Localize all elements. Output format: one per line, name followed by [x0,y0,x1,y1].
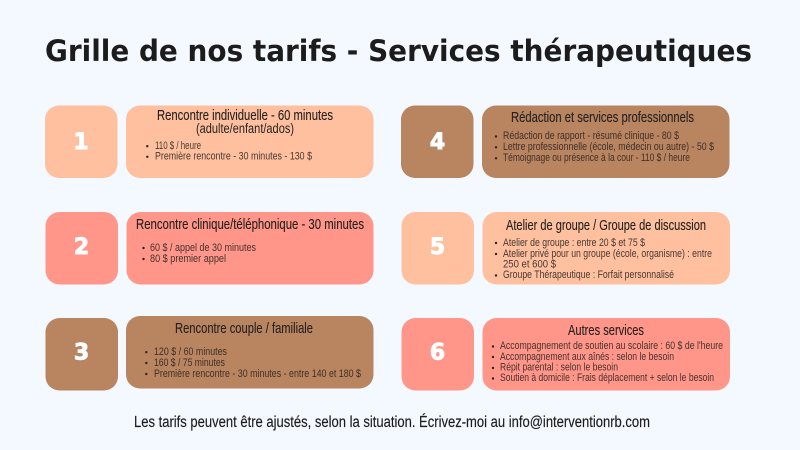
panel: service 1 [45,106,374,178]
card: rencontre clinique: 60 $ / appel de 30 minutes [150,242,256,254]
number badge 1 [45,106,118,178]
card: atelier de groupe: Atelier de groupe : entre 20 $ et 75 $ [503,237,645,249]
title: Grille de nos tarifs - Services thérapeutiques [45,34,752,68]
panel: service 6 [402,318,730,390]
card: rédaction: Lettre professionnelle (école, médecin ou autre) - 50 $ [503,141,714,153]
card: rencontre clinique [126,212,374,284]
number badge 5 [402,212,474,284]
card: rencontre individuelle: Rencontre individuelle - 60 minutes [157,108,333,124]
card: rencontre individuelle [126,106,374,178]
number badge 1: 1 [73,130,89,155]
card: atelier de groupe: Atelier de groupe / Groupe de discussion [506,218,706,234]
card: autres services: Accompagnement aux aînés : selon le besoin [500,351,674,363]
card: rencontre couple: 120 $ / 60 minutes [154,346,227,358]
card: atelier de groupe: Atelier privé pour un groupe (école, organisme) : entre [503,248,712,260]
card: autres services: Soutien à domicile : Frais déplacement + selon le besoin [500,372,714,384]
card: autres services [482,318,730,390]
card: rédaction: Rédaction de rapport - résumé clinique - 80 $ [503,130,679,142]
number badge 4 [401,106,474,178]
card: rédaction: Rédaction et services professionnels [511,110,694,126]
card: rencontre individuelle: Première rencontre - 30 minutes - 130 $ [155,150,312,162]
card: rencontre clinique: 80 $ premier appel [150,253,226,265]
number badge 2: 2 [74,235,89,260]
card: rencontre couple: Première rencontre - 30 minutes - entre 140 et 180 $ [154,368,361,380]
card: rencontre couple: Rencontre couple / familiale [175,321,313,337]
card: rencontre clinique: Rencontre clinique/téléphonique - 30 minutes [136,217,364,233]
panel: service 3 [46,316,374,390]
panel: service 2 [46,212,374,284]
card: rencontre individuelle: 110 $ / heure [155,140,201,152]
card: autres services: Accompagnement de soutien au scolaire : 60 $ de l'heure [500,340,723,352]
card: rédaction: Témoignage ou présence à la cour - 110 $ / heure [503,152,690,164]
card: rencontre couple: 160 $ / 75 minutes [154,357,225,369]
card: atelier de groupe [482,212,730,284]
card: autres services: Autres services [568,323,644,339]
card: atelier de groupe: 250 et 600 $ [503,258,556,270]
footer note: Les tarifs peuvent être ajustés, selon la situation. Écrivez-moi au info@interventionrb.com [134,414,650,431]
card: atelier de groupe: Groupe Thérapeutique : Forfait personnalisé [503,269,674,281]
number badge 6 [402,318,474,390]
card: rencontre couple [126,316,374,388]
number badge 6: 6 [430,340,445,366]
number badge 3 [46,318,118,390]
panel: service 4 [401,106,730,178]
card: rencontre individuelle: (adulte/enfant/ados) [196,121,294,136]
number badge 3: 3 [74,340,89,366]
number badge 5: 5 [430,235,445,260]
card: rédaction [482,106,730,178]
number badge 2 [46,212,118,284]
card: autres services: Répit parental : selon le besoin [500,362,618,374]
number badge 4: 4 [430,130,445,155]
panel: service 5 [402,212,730,284]
